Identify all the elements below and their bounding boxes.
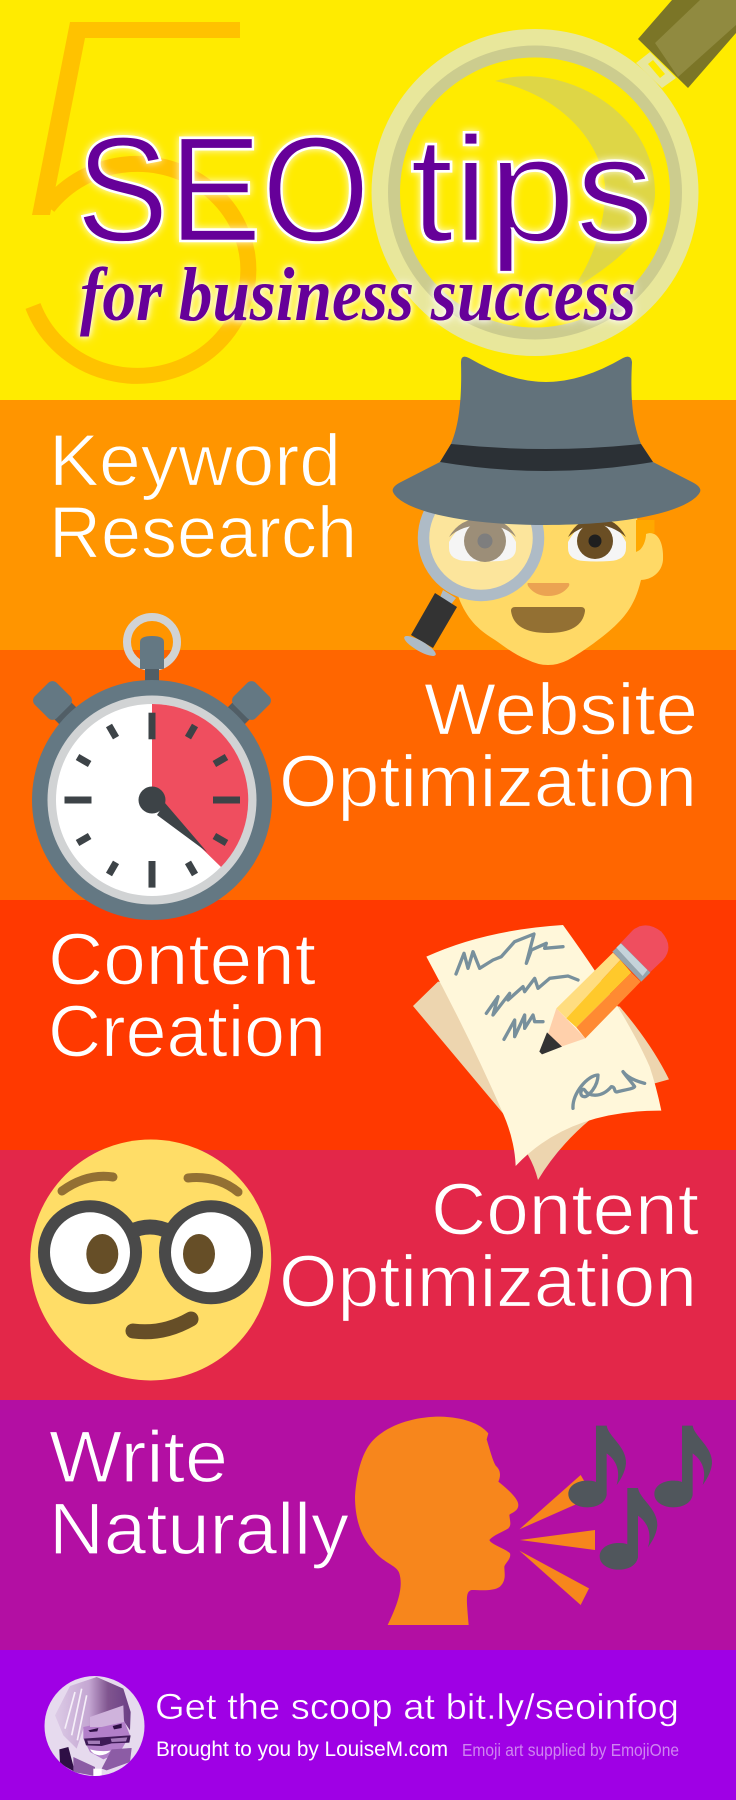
icon: singing head with music notes [355, 1417, 712, 1625]
band: content creation [0, 900, 736, 1150]
band: website optimization [0, 650, 736, 900]
heading: content optimization: Content [431, 1170, 699, 1250]
heading: content optimization: Optimization [279, 1242, 697, 1322]
icon: big background number 5 [32, 22, 248, 376]
heading: content creation: Content [48, 920, 316, 1000]
band: write naturally [0, 1400, 736, 1650]
icon: background magnifying glass [372, 0, 736, 356]
heading: website optimization: Website [424, 670, 698, 750]
heading: website optimization [279, 670, 698, 822]
title: SEO [76, 105, 370, 273]
band: footer [0, 1650, 736, 1800]
footer text: Get the scoop at bit.ly/seoinfog [155, 1686, 679, 1727]
footer text: Emoji art supplied by EmojiOne [462, 1740, 679, 1760]
icon: detective face with magnifier [393, 357, 700, 665]
heading: content creation [48, 920, 326, 1072]
icon: author portrait [44, 1676, 145, 1776]
footer text: Brought to you by LouiseM.com [156, 1738, 448, 1761]
title: tips [410, 105, 654, 273]
heading: keyword research: Research [49, 492, 357, 574]
subtitle: for business success [80, 253, 636, 337]
heading: keyword research [49, 420, 357, 574]
heading: write naturally [49, 1417, 350, 1570]
icon: paper and pencil [413, 925, 669, 1180]
band: keyword research [0, 400, 736, 650]
icon: stopwatch [31, 617, 273, 920]
title [76, 105, 654, 273]
heading: content creation: Creation [48, 992, 326, 1072]
footer text [155, 1686, 679, 1761]
band: content optimization [0, 1150, 736, 1400]
heading: content optimization [279, 1170, 699, 1322]
heading: website optimization: Optimization [279, 742, 697, 822]
heading: keyword research: Keyword [49, 420, 341, 502]
icon: nerd face [30, 1140, 271, 1380]
heading: write naturally: Write [49, 1417, 228, 1498]
heading: write naturally: Naturally [49, 1489, 350, 1570]
band: header [0, 0, 736, 400]
